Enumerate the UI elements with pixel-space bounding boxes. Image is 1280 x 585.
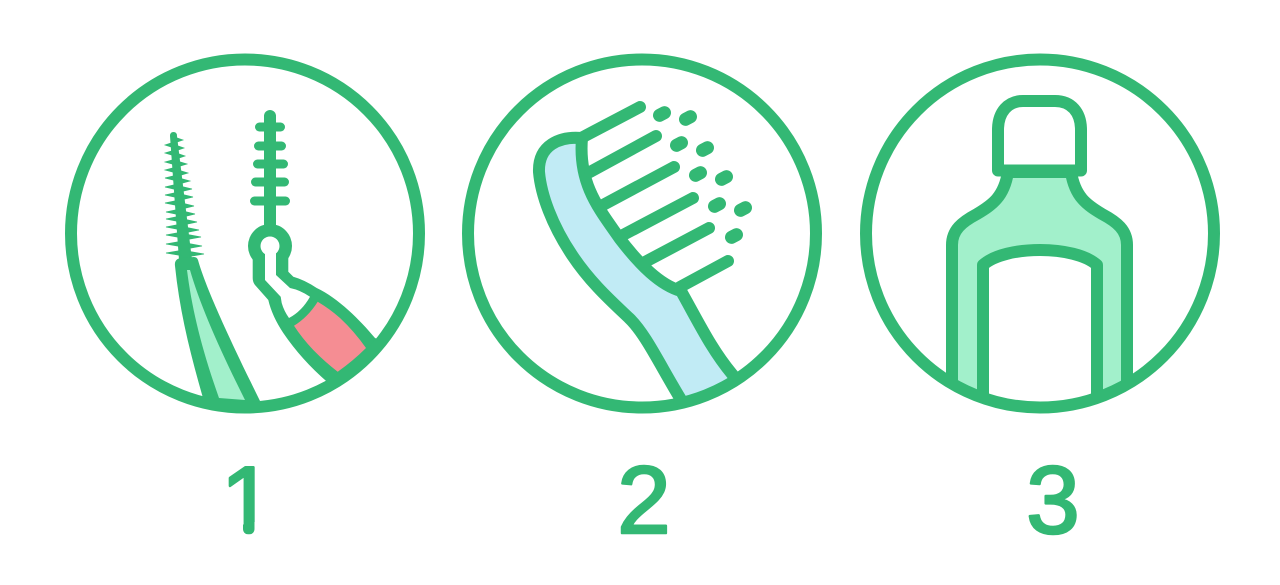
panel: step 1 interdental brushes [71, 60, 419, 408]
icon: ring 1 [71, 60, 419, 408]
number 3: 3 [1026, 447, 1080, 554]
icon: bottle label [983, 250, 1097, 420]
icon: toothbrush bristles [583, 107, 746, 287]
icon: tapered interdental brush [165, 132, 262, 405]
panel: step 3 mouthwash bottle [866, 60, 1214, 420]
number 2: 2 [617, 447, 671, 554]
icon: bottle body [952, 172, 1127, 420]
icon: ring 2 [468, 60, 816, 408]
icon: looped interdental brush [248, 110, 376, 381]
icon: toothbrush handle [532, 132, 738, 399]
icon: ring 3 [866, 60, 1214, 408]
number 1: 1 [221, 447, 274, 554]
icon: bottle cap [998, 101, 1081, 170]
panel: step 2 toothbrush [468, 60, 816, 425]
